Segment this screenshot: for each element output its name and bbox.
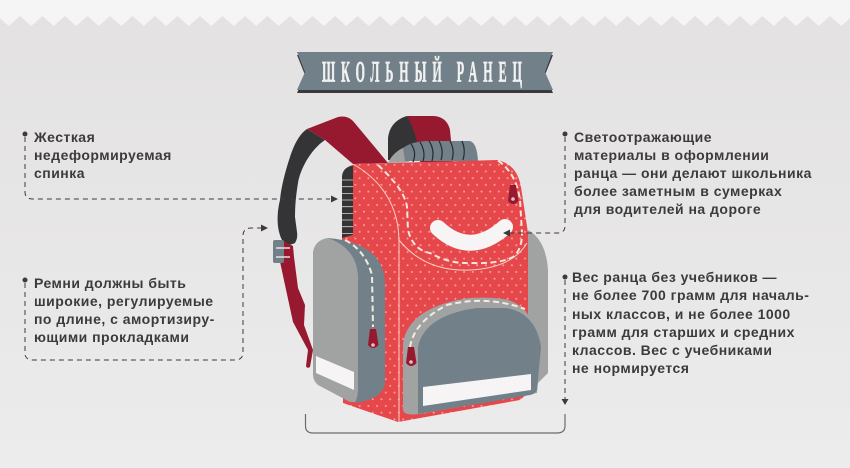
callout text: weight: грамм для старших и средних	[572, 324, 795, 340]
carry handle on flap	[438, 227, 505, 243]
width bracket	[306, 414, 565, 433]
flap seams	[353, 160, 527, 422]
top handle	[388, 141, 478, 163]
callout text: reflective materials: материалы в оформлении	[574, 147, 769, 163]
callout text: reflective materials: для водителей на дороге	[574, 201, 761, 217]
callout text: back panel: спинка	[34, 165, 85, 181]
callout leader: reflective materials	[503, 132, 568, 236]
callout text: weight: не более 700 грамм для началь-	[572, 287, 809, 303]
callout text: weight: классов. Вес с учебниками	[572, 342, 772, 358]
callout text: weight: ных классов, и не более 1000	[572, 306, 791, 322]
callout text: straps: широкие, регулируемые	[34, 293, 214, 309]
shoulder strap	[278, 116, 388, 244]
callout leader: straps	[22, 224, 268, 360]
callout text: weight: не нормируется	[572, 360, 689, 376]
front pocket	[403, 298, 541, 414]
callout text: straps: по длине, с амортизиру-	[34, 311, 215, 327]
strap buckle	[273, 240, 290, 263]
callout text: back panel: Жесткая	[33, 129, 95, 145]
side pocket left	[313, 238, 385, 403]
callout text: reflective materials: ранца — они делают школьника	[574, 165, 812, 181]
callout text: reflective materials: более заметным в сумерках	[574, 183, 782, 199]
top loop strap	[388, 116, 453, 162]
callout leader: back panel	[22, 132, 338, 202]
backpack illustration	[273, 116, 548, 422]
callout text: straps: ющими прокладками	[34, 329, 189, 345]
callout text: straps: Ремни должны быть	[34, 275, 186, 291]
lower adjustable strap	[279, 240, 313, 368]
back panel	[342, 165, 354, 238]
title: ШКОЛЬНЫЙ РАНЕЦ	[322, 55, 522, 88]
bag body	[342, 160, 528, 422]
callout text: weight: Вес ранца без учебников —	[572, 269, 777, 285]
title banner	[297, 52, 553, 93]
callout leader: weight	[562, 274, 568, 405]
zigzag top edge	[0, 0, 850, 26]
callout text: back panel: недеформируемая	[34, 147, 172, 163]
callout text: reflective materials: Светоотражающие	[574, 129, 712, 145]
side pocket right	[528, 230, 548, 384]
zipper pulls	[368, 185, 518, 366]
